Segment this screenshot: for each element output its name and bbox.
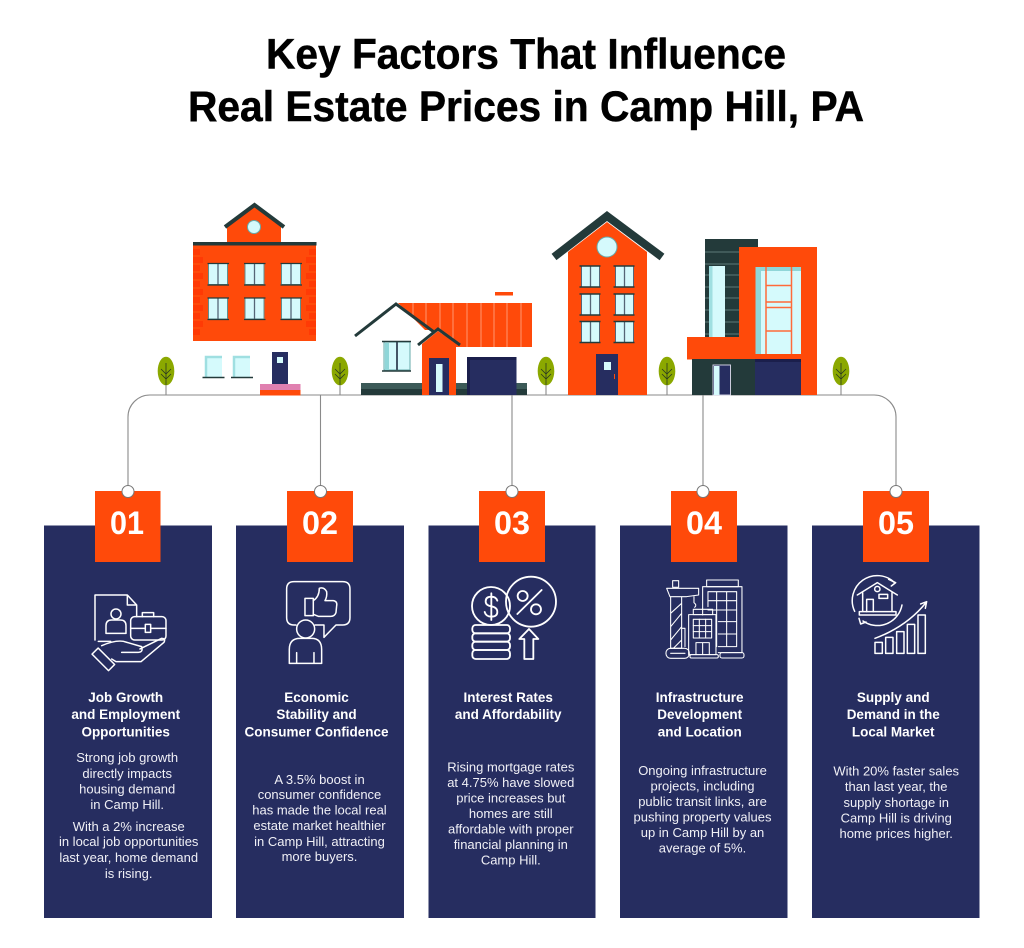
body text: Ongoing infrastructure: [638, 763, 767, 778]
heading: [244, 690, 389, 740]
heading: Stability and: [276, 707, 357, 722]
heading: Consumer Confidence: [244, 724, 389, 740]
number tab 05: 05: [878, 505, 914, 541]
body text: in Camp Hill.: [90, 797, 164, 812]
heading: Opportunities: [81, 724, 170, 740]
body text: directly impacts: [82, 766, 172, 781]
card 2: economic stability: [236, 486, 404, 918]
building 2: bungalow with garage: [355, 292, 532, 395]
heading: [71, 690, 181, 740]
heading: Infrastructure: [656, 690, 744, 705]
body text: pushing property values: [633, 810, 772, 824]
number tab 03: [479, 486, 545, 562]
number tab 05: [863, 486, 929, 562]
building 3: tall gabled townhouse: [554, 216, 662, 395]
body text: is rising.: [105, 866, 153, 881]
body text: [833, 764, 960, 841]
body text: projects, including: [650, 778, 755, 794]
body text: in Camp Hill, attracting: [254, 834, 385, 849]
body text: consumer confidence: [258, 787, 381, 802]
body text: Camp Hill is driving: [841, 810, 952, 826]
body text: public transit links, are: [638, 794, 767, 809]
body text: supply shortage in: [843, 795, 949, 810]
body text: [59, 750, 199, 881]
icon: crane and buildings: [666, 580, 744, 658]
body text: Strong job growth: [76, 750, 178, 765]
body text: home prices higher.: [839, 826, 953, 841]
building 1: brick apartment: [193, 205, 316, 396]
heading: Local Market: [852, 724, 935, 740]
connector lines: [128, 395, 896, 491]
heading: [656, 690, 744, 740]
number tab 01: 01: [110, 505, 144, 541]
body text: Rising mortgage rates: [447, 760, 575, 774]
body text: up in Camp Hill by an: [641, 825, 764, 840]
body text: affordable with proper: [448, 822, 574, 836]
body text: estate market healthier: [253, 818, 386, 833]
body text: more buyers.: [282, 849, 357, 864]
body text: in local job opportunities: [59, 834, 199, 849]
heading: Development: [657, 707, 743, 722]
body text: homes are still: [469, 806, 553, 821]
body text: last year, home demand: [59, 850, 198, 865]
body text: With a 2% increase: [73, 819, 185, 834]
body text: [252, 772, 387, 864]
card 1: job growth: [44, 486, 212, 918]
heading: Supply and: [857, 690, 930, 705]
card 3: interest rates: [428, 486, 596, 918]
body text: price increases but: [456, 790, 566, 806]
body text: has made the local real: [252, 802, 387, 818]
body text: average of 5%.: [659, 840, 746, 856]
number tab 01: [95, 486, 160, 562]
title: [188, 30, 864, 131]
body text: Camp Hill.: [481, 852, 541, 868]
heading: [455, 690, 562, 722]
body text: A 3.5% boost in: [274, 772, 365, 787]
number tab 03: 03: [494, 505, 530, 541]
body text: financial planning in: [454, 837, 568, 852]
heading: Interest Rates: [464, 690, 553, 705]
card 5: supply and demand: [812, 486, 980, 918]
number tab 04: [671, 486, 737, 562]
icon: job document and hand: [92, 595, 166, 671]
heading: and Location: [658, 724, 742, 740]
icon: person with thumbs-up speech bubble: [287, 582, 350, 663]
building 4: modern house: [687, 239, 817, 395]
body text: With 20% faster sales: [833, 764, 960, 778]
heading: and Employment: [71, 707, 181, 722]
body text: housing demand: [79, 782, 175, 796]
number tab 02: [287, 486, 353, 562]
card 4: infrastructure: [620, 486, 788, 918]
trees: [158, 357, 849, 395]
heading: and Affordability: [455, 707, 562, 722]
body text: [633, 763, 772, 856]
title: Real Estate Prices in Camp Hill, PA: [188, 83, 864, 131]
body text: [447, 760, 575, 868]
heading: [847, 690, 940, 740]
title: Key Factors That Influence: [266, 30, 786, 78]
number tab 02: 02: [302, 505, 338, 541]
icon: house with rising bar chart: [852, 576, 927, 653]
icon: coins and percent balloon: [472, 577, 556, 659]
heading: Demand in the: [847, 707, 940, 722]
body text: at 4.75% have slowed: [447, 775, 574, 790]
body text: than last year, the: [845, 779, 948, 794]
heading: Job Growth: [88, 690, 163, 705]
heading: Economic: [284, 690, 349, 705]
number tab 04: 04: [686, 505, 722, 541]
